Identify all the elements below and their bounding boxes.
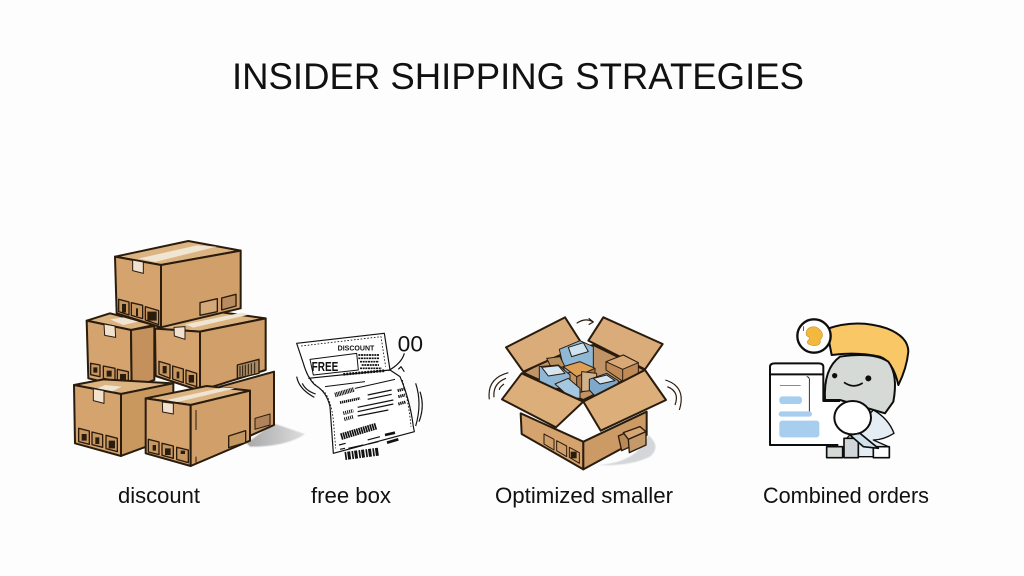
ground shadow	[247, 423, 305, 447]
ground shadow	[597, 435, 655, 465]
box: bottom left	[74, 379, 173, 456]
box interior	[523, 345, 645, 400]
motion lines	[297, 353, 422, 426]
label: combined orders: Combined orders	[763, 483, 929, 508]
coin badge	[797, 319, 831, 353]
icon: free box coupon	[297, 331, 423, 456]
box: top	[115, 241, 241, 327]
body	[847, 410, 894, 457]
label: optimized smaller: Optimized smaller	[495, 483, 673, 508]
small packages	[539, 341, 638, 398]
face	[825, 355, 895, 413]
hair	[827, 323, 908, 385]
feet and legs	[827, 433, 889, 458]
box: bottom front	[146, 386, 250, 466]
icon: stack of cardboard boxes	[74, 241, 305, 466]
coupon outline	[297, 333, 414, 453]
label: free box: free box	[311, 483, 391, 508]
box body	[521, 412, 647, 469]
icon: open box with smaller packages	[489, 317, 681, 469]
back flaps	[506, 317, 663, 372]
box: middle left	[87, 313, 154, 388]
box: middle right	[155, 312, 266, 391]
hand	[834, 401, 871, 434]
order panel	[770, 363, 840, 445]
front flaps	[502, 370, 666, 431]
box: back lower right	[220, 372, 274, 437]
coupon text: FREE	[312, 360, 338, 374]
coupon sweep number: 00	[398, 331, 423, 356]
icon: character with order panel	[770, 319, 908, 458]
eyes and smile	[832, 373, 871, 386]
coupon heading: DISCOUNT	[338, 344, 375, 353]
printed lines and barcodes	[325, 355, 406, 456]
small box at corner	[618, 427, 646, 453]
label: discount: discount	[118, 483, 200, 508]
motion arcs	[489, 318, 681, 410]
title: INSIDER SHIPPING STRATEGIES	[232, 55, 804, 97]
